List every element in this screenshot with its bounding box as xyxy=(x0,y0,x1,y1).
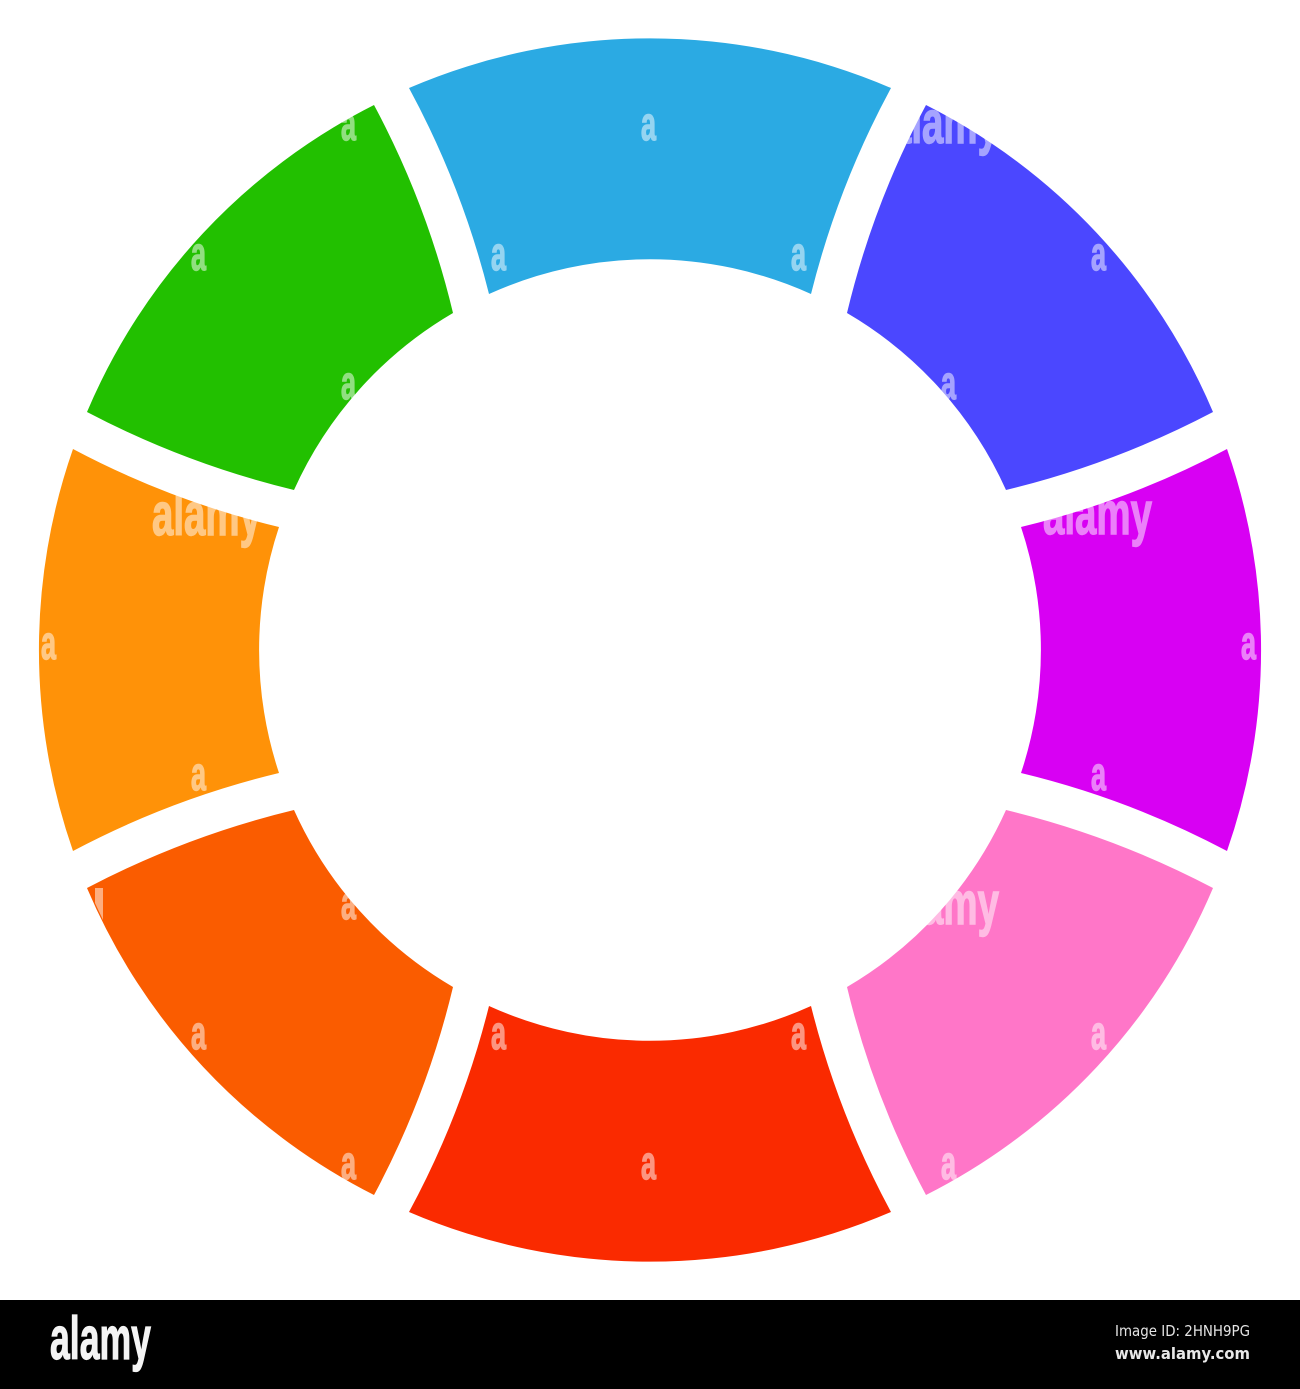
watermark: repeated stock photo marks over the ring: a xyxy=(191,227,206,280)
watermark: repeated stock photo marks over the ring: a xyxy=(941,1136,956,1189)
segment: green xyxy=(87,105,453,490)
segment: red xyxy=(409,1006,891,1262)
watermark: repeated stock photo marks over the ring: alamy xyxy=(890,870,999,937)
footer logo: alamy xyxy=(50,1305,151,1372)
watermark: repeated stock photo marks over the ring: a xyxy=(1091,1006,1106,1059)
watermark: repeated stock photo marks over the ring: a xyxy=(1091,747,1106,800)
segment: orange red xyxy=(87,810,453,1195)
image id: Image ID: 2HNH9PG xyxy=(1115,1322,1250,1340)
watermark: repeated stock photo marks over the ring: a xyxy=(791,227,806,280)
watermark: repeated stock photo marks over the ring: a xyxy=(341,1136,356,1189)
watermark: repeated stock photo marks over the ring: a xyxy=(791,1006,806,1059)
watermark: repeated stock photo marks over the ring: a xyxy=(1091,227,1106,280)
watermark: repeated stock photo marks over the ring: a xyxy=(641,97,656,150)
watermark: repeated stock photo marks over the ring: a xyxy=(341,356,356,409)
watermark: repeated stock photo marks over the ring: a xyxy=(341,876,356,929)
watermark: repeated stock photo marks over the ring: a xyxy=(341,97,356,150)
watermark: repeated stock photo marks over the ring: a xyxy=(191,1006,206,1059)
watermark: repeated stock photo marks over the ring: alamy xyxy=(152,481,261,548)
website: www.alamy.com xyxy=(1115,1344,1250,1363)
segment: orange xyxy=(39,449,279,851)
segment: indigo blue xyxy=(847,105,1213,490)
watermark: repeated stock photo marks over the ring: a xyxy=(491,227,506,280)
segment: magenta purple xyxy=(1021,449,1261,851)
watermark: repeated stock photo marks over the ring: a xyxy=(41,616,56,669)
watermark: repeated stock photo marks over the ring: a xyxy=(641,1136,656,1189)
watermark: repeated stock photo marks over the ring: a xyxy=(491,1006,506,1059)
watermark: repeated stock photo marks over the ring: a xyxy=(941,356,956,409)
watermark: repeated stock photo marks over the ring: alamy xyxy=(890,89,999,156)
watermark: repeated stock photo marks over the ring: a xyxy=(191,747,206,800)
watermark: repeated stock photo marks over the ring: a xyxy=(1241,616,1256,669)
footer bar xyxy=(0,1300,1300,1389)
segment: pink xyxy=(847,810,1213,1195)
watermark: repeated stock photo marks over the ring xyxy=(41,89,1256,1189)
watermark: repeated stock photo marks over the ring: alamy xyxy=(1043,480,1152,547)
segment: sky blue xyxy=(409,38,891,294)
